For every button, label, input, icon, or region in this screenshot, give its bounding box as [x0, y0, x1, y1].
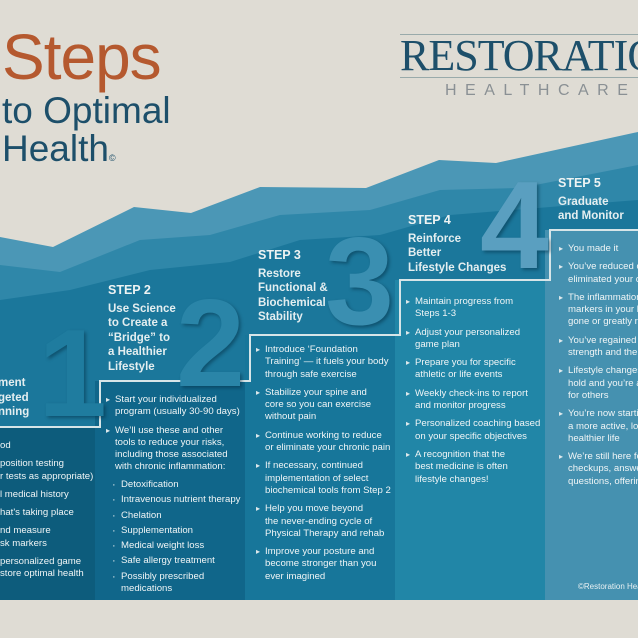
panel: step 2: Possibly prescribed — [121, 571, 204, 582]
panel: step 3: Physical Therapy and rehab — [265, 528, 384, 539]
panel: step 3: Continue working to reduce — [265, 430, 382, 441]
panel: step 4: athletic or life events — [415, 369, 502, 380]
panel: step 3 — [256, 248, 391, 582]
panel: step 4: Steps 1-3 — [415, 308, 456, 319]
panel: step 5: for others — [568, 390, 609, 401]
panel: step 1: nd measure — [0, 525, 51, 536]
panel: step 4: game plan — [415, 339, 460, 350]
panel: step 5: You made it — [568, 243, 618, 254]
panel: step 1: od — [0, 440, 11, 451]
big digits: 4 — [480, 157, 549, 295]
panel: step 3: Improve your posture and — [265, 546, 374, 557]
panel: step 2: Medical weight loss — [121, 540, 204, 551]
panel: step 4: Reinforce — [408, 232, 461, 244]
panel: step 2: Start your individualized — [115, 394, 217, 405]
panel: step 3: implementation of select — [265, 473, 368, 484]
panel: step 3: Training’ — it fuels your body — [265, 356, 389, 367]
panel: step 3: Restore — [258, 268, 301, 280]
panel: step 1: personalized game — [0, 556, 81, 567]
panel: step 2: Chelation — [121, 510, 162, 521]
panel: step 4: and monitor progress — [415, 400, 506, 411]
panel: step 2: with chronic inflammation: — [115, 461, 225, 472]
panel: step 1: r tests as appropriate) — [0, 471, 93, 482]
panel: step 4: Adjust your personalized — [415, 327, 520, 338]
panel: step 5: STEP 5 — [558, 176, 601, 190]
panel: step 4: on your specific objectives — [415, 431, 527, 442]
panel: step 2: program (usually 30-90 days) — [115, 406, 240, 417]
panel: step 3: STEP 3 — [258, 248, 301, 262]
panel: step 4: STEP 4 — [408, 213, 451, 227]
panel: step 2: Lifestyle — [108, 360, 155, 372]
panel: step 3: Help you move beyond — [265, 503, 363, 514]
panel: step 3: If necessary, continued — [265, 460, 363, 471]
panel: step 2: to Create a — [108, 317, 167, 329]
panel: step 2: STEP 2 — [108, 283, 151, 297]
panel: step 3: without pain — [265, 411, 316, 422]
title: Health© — [2, 128, 116, 169]
panel: step 2: Safe allergy treatment — [121, 555, 215, 566]
panel: step 5: healthier life — [568, 433, 620, 444]
panel: step 4: Prepare you for specific — [415, 357, 516, 368]
panel: step 2: tools to reduce your risks, — [115, 437, 224, 448]
panel: step 1: position testing — [0, 458, 64, 469]
panel: step 1: store optimal health — [0, 568, 84, 579]
panel: step 4 — [406, 213, 540, 485]
panel: step 4: Maintain progress from — [415, 296, 513, 307]
panel: step 3: become stronger than you — [265, 558, 376, 569]
panel: step 2: Intravenous nutrient therapy — [121, 494, 240, 505]
panel: step 1: l medical history — [0, 489, 69, 500]
panel: step 3: the never-ending cycle of — [265, 516, 372, 527]
panel: step 3: core so you can exercise — [265, 399, 371, 410]
title: Steps — [2, 21, 161, 93]
panel: step 2: Use Science — [108, 302, 176, 314]
title — [2, 21, 171, 169]
big digits: 2 — [176, 275, 245, 413]
panel: step 3: through safe exercise — [265, 369, 357, 380]
panel: step 3: Stabilize your spine and — [265, 387, 367, 398]
panel: step 2: a Healthier — [108, 346, 167, 358]
big digits: 3 — [325, 213, 394, 351]
panel: step 3: Introduce ‘Foundation — [265, 344, 358, 355]
panel: step 4: A recognition that the — [415, 449, 505, 460]
panel: step 5 — [558, 176, 638, 591]
panel: step 4: Weekly check-ins to report — [415, 388, 528, 399]
panel: step 2 — [106, 283, 240, 594]
panel: step 3: ever imagined — [265, 571, 325, 582]
panel: step 1 — [0, 377, 93, 579]
panel: step 2: medications — [121, 583, 172, 594]
big digits: 1 — [38, 305, 107, 443]
panel: step 4: Lifestyle Changes — [408, 262, 506, 274]
panel: step 4: lifestyle changes! — [415, 474, 489, 485]
panel: step 2: including those associated — [115, 449, 228, 460]
panel: step 5: Graduate — [558, 196, 608, 208]
panel: step 4: Better — [408, 247, 441, 259]
panel: step 2: We’ll use these and other — [115, 425, 223, 436]
panel: step 4: Personalized coaching based — [415, 418, 540, 429]
panel: step 3: Functional & — [258, 282, 328, 294]
panel: step 2: “Bridge” to — [108, 332, 170, 344]
panel: step 5: and Monitor — [558, 210, 624, 222]
panel: step 3: or eliminate your chronic pain — [265, 442, 390, 453]
title: to Optimal — [2, 90, 171, 131]
panel: step 3: biochemical tools from Step 2 — [265, 485, 391, 496]
panel: step 1: hat's taking place — [0, 507, 74, 518]
panel: step 3: Biochemical — [258, 296, 326, 308]
panel: step 2: Supplementation — [121, 525, 193, 536]
panel: step 2: Detoxification — [121, 479, 179, 490]
panel: step 1: sk markers — [0, 538, 47, 549]
panel: step 4: best medicine is often — [415, 461, 508, 472]
logo: HEALTHCARE — [445, 82, 636, 99]
panel: step 3: Stability — [258, 311, 303, 323]
